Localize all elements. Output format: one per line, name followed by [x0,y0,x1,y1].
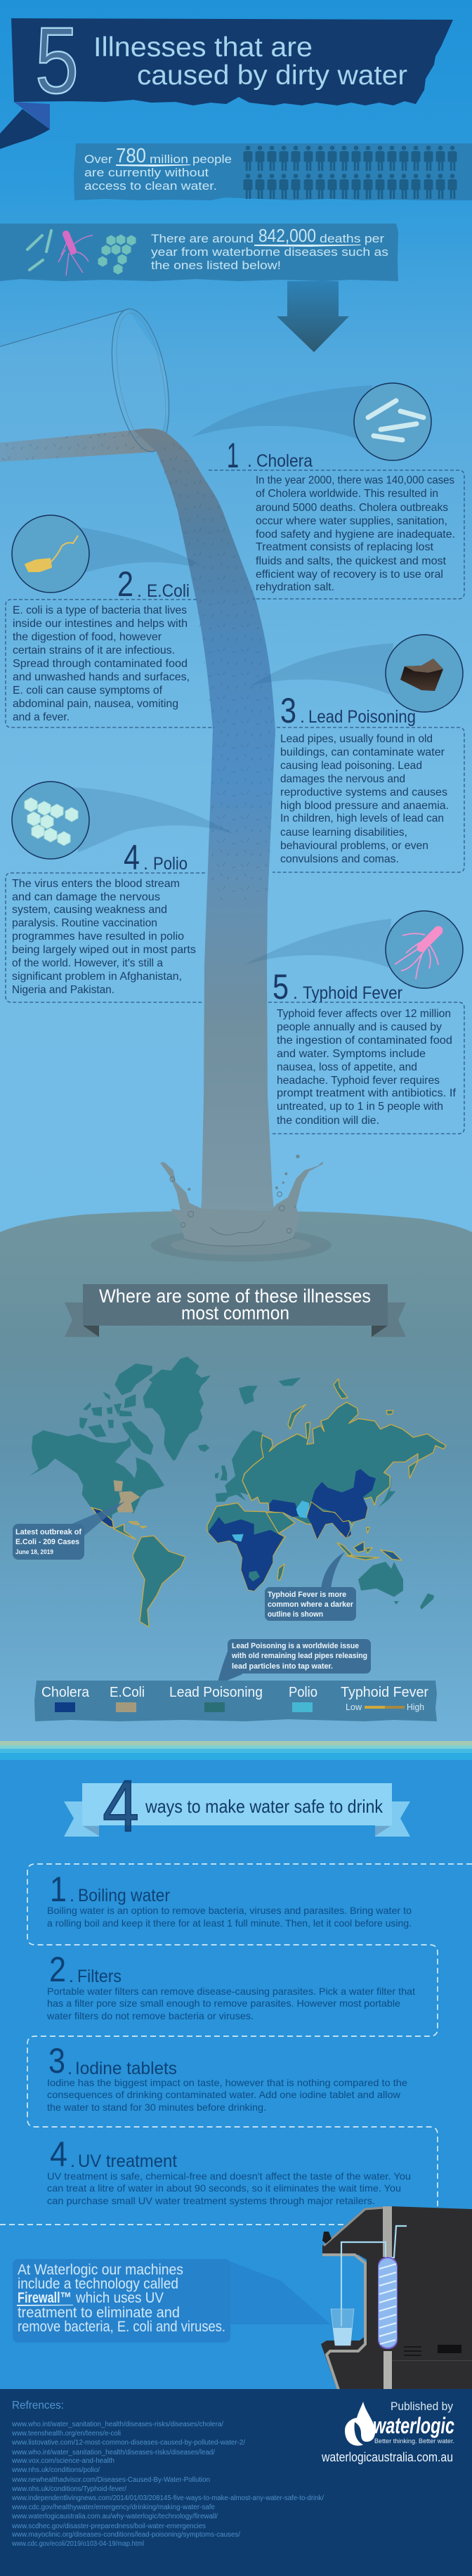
heading: 2 [49,1950,66,1989]
heading: . [137,581,142,601]
water splash [151,1155,332,1262]
body text: prompt treatment with antibiotics. If [277,1087,457,1099]
heading [48,2041,177,2080]
body text: and can damage the nervous [12,891,160,903]
callout: latest e. coli outbreak: June 18, 2019 [15,1548,53,1555]
method 4: uv treatment [47,2135,411,2206]
statistic text: There are around [151,232,254,245]
body text: fluids and salts, the quickest and most [256,555,447,567]
references: Refrences: [12,2400,64,2412]
heading: 4 [124,838,140,877]
body text [12,878,196,996]
references: www.newhealthadvisor.com/Diseases-Caused-By-Water-Pollution [11,2476,210,2484]
illustration: water cooler machine [321,2206,472,2390]
drinking glass [331,2309,354,2345]
body text: headache. Typhoid fever requires [277,1075,440,1087]
publisher block: Published by [391,2400,453,2413]
icon: germs [27,231,136,276]
body text: a rolling boil and keep it there for at least 1 full minute. Then, let it cool before using. [47,1917,412,1929]
references: www.independentlivingnews.com/2014/01/03/208145-five-ways-to-make-almost-any-water-safe-to-drink/ [11,2494,324,2502]
ribbon text [99,1286,371,1323]
map: europe, asia, africa [207,1378,446,1591]
heading [280,691,416,730]
method 3: iodine tablets [47,2041,407,2113]
pool of dirty water [0,1211,472,1741]
heading [50,1870,170,1909]
world map [29,1357,446,1627]
body text [277,1008,457,1127]
heading: Iodine tablets [75,2059,177,2078]
heading: . [300,707,305,727]
body text: the water to stand for 30 minutes before drinking. [47,2102,266,2113]
machine tubes [341,2226,407,2326]
heading: Boiling water [78,1886,170,1905]
body text [13,604,190,723]
references: www.scdhec.gov/disaster-preparedness/boil-water-emergencies [11,2523,206,2530]
big number five: 5 [35,8,79,113]
body text: Boiling water is an option to remove bacteria, viruses and parasites. Bring water to [47,1905,412,1916]
heading [227,436,313,475]
panel: 842,000 deaths statistic [0,224,398,281]
icon: polio virus cells [12,782,89,859]
legend labels: Cholera [41,1685,90,1700]
body text: paralysis. Routine vaccination [12,917,157,929]
heading: 1 [227,436,239,475]
map: central america [91,1508,146,1539]
callout: typhoid fever [265,1552,356,1621]
title text: caused by dirty water [137,60,407,91]
references: www.who.int/water_sanitation_health/diseases-risks/diseases/cholera/ [11,2421,223,2428]
body text: convulsions and comas. [280,853,399,865]
callout: typhoid fever: Typhoid Fever is more [268,1591,346,1599]
panel: 780 million statistic [74,143,472,200]
callout: lead poisoning [217,1639,371,1685]
body text: consequences of drinking contaminated water. Add one iodine tablet and allow [47,2089,401,2100]
callout beam [191,385,372,439]
dashed serpentine outline of the four methods [0,1864,472,2225]
beam from firewall panel to glass [229,2261,331,2324]
statistic text: year from waterborne diseases such as [151,245,388,259]
body text: of the world. However, it's still a [12,957,163,969]
body text: behavioural problems, or even [280,840,428,852]
statistic text [151,225,388,272]
body text [256,474,455,593]
heading: Typhoid Fever [303,983,402,1003]
heading ribbon: where illnesses are common [65,1284,406,1337]
body text: untreated, up to 1 in 5 people with [277,1101,443,1113]
references: www.cdc.gov/ecoli/2019/o103-04-19/map.html [11,2540,144,2548]
legend scale low to high: High [407,1702,424,1712]
references: www.mayoclinic.org/diseases-conditions/lead-poisoning/symptoms-causes/ [11,2531,240,2539]
body text: occur where water supplies, sanitation, [256,515,447,527]
icon: lead chunk [386,635,463,712]
title banner [0,8,453,149]
ribbon text: ways to make water safe to drink [145,1796,383,1817]
body text: E. coli is a type of bacteria that lives [13,604,187,616]
body text: Iodine has the biggest impact on taste, however that is nothing compared to the [47,2077,407,2088]
body text: programmes have resulted in polio [12,931,184,943]
callout: typhoid fever: outline is shown [268,1610,323,1619]
body text: causing lead poisoning. Lead [280,760,422,772]
callout: lead poisoning: Lead Poisoning is a worldwide issue [232,1642,359,1650]
legend labels: Typhoid Fever [341,1685,428,1700]
references: www.teenshealth.org/en/teens/e-coli [11,2430,121,2438]
heading: 4 [50,2135,67,2174]
heading [124,838,188,877]
uv coil [378,2257,398,2349]
callout: latest e. coli outbreak [13,1501,125,1560]
heading: . [143,854,148,874]
body text: food safety and hygiene are inadequate. [256,529,455,541]
heading [49,1950,122,1989]
disease 1: cholera [191,383,464,599]
map legend [34,1681,437,1721]
heading ribbon: 4 ways to make water safe [64,1766,410,1847]
body text: people annually and is caused by [277,1021,442,1033]
statistic text: million [150,153,188,166]
body text: the ingestion of contaminated food [277,1035,452,1047]
ribbon text: Where are some of these illnesses [99,1286,371,1307]
legend swatches [55,1702,313,1712]
panel: waterlogic firewall [13,2259,230,2343]
heading: 1 [50,1870,67,1909]
disease 2: e. coli [6,515,214,727]
ribbon text: most common [181,1302,289,1323]
body text: significant problem in Afghanistan, [12,971,182,983]
statistic text: are currently without [84,166,209,179]
body text [46,1986,415,2021]
statistic text: people [192,153,232,166]
callout: latest e. coli outbreak: E.Coli - 209 Cases [15,1538,79,1546]
heading: . [70,2151,75,2171]
firewall text: At Waterlogic our machines [18,2262,183,2278]
references [11,2400,324,2548]
heading: UV treatment [78,2151,177,2171]
method 1: boiling water [47,1870,412,1929]
water pouring stream [133,429,275,1223]
body text: the condition will die. [277,1115,379,1127]
disease 4: polio [6,782,235,1002]
body text: and a fever. [13,711,70,723]
heading: E.Coli [147,581,190,601]
body text: has a filter pore size small enough to remove parasites. However most portable [47,1998,400,2009]
callout beam [72,787,235,853]
icon: typhoid bacterium [386,911,463,988]
body text: reproductive systems and causes [280,787,447,798]
body text [47,2077,407,2113]
map: indonesia and islands [337,1527,402,1560]
heading: . [70,1886,74,1905]
body text: In children, high levels of lead can [280,813,444,824]
legend scale low to high [346,1702,424,1712]
statistic text [84,145,232,193]
statistic text: 780 [116,145,146,167]
heading: . [69,1967,74,1986]
callout beam [244,919,391,968]
callout: typhoid fever: common where a darker [268,1600,354,1609]
firewall text [18,2262,225,2335]
body text: around 5000 deaths. Cholera outbreaks [256,502,448,514]
heading [273,967,402,1007]
body text: Lead pipes, usually found in old [280,733,433,745]
disease 5: typhoid fever [244,911,464,1134]
title text [93,32,407,91]
body text: Nigeria and Pakistan. [12,984,114,996]
firewall text: include a technology called [18,2276,178,2292]
publisher block: waterlogicaustralia.com.au [321,2450,453,2464]
body text: Typhoid fever affects over 12 million [277,1008,451,1020]
body text: cause learning disabilities, [280,827,407,839]
big number four: 4 [103,1766,139,1847]
callout beam [80,527,197,573]
publisher block: Better thinking. Better water. [374,2438,454,2445]
legend labels: Polio [289,1685,317,1700]
heading [117,564,190,604]
body text: Spread through contaminated food [13,658,188,670]
body text: and unwashed hands and surfaces, [13,671,190,683]
body text: system, causing weakness and [12,904,167,916]
map: cholera regions [209,1469,376,1591]
map: polio regions [232,1501,309,1541]
title text: Illnesses that are [93,32,313,63]
body text: being largely wiped out in most parts [12,944,196,956]
firewall text: Firewall™ [18,2290,72,2306]
body text: water filters do not remove bacteria or viruses. [46,2010,254,2021]
references: www.listovative.com/12-most-common-diseases-caused-by-polluted-water-2/ [11,2439,245,2447]
icon: waterlogic water drop logo [345,2402,375,2446]
heading: Cholera [256,451,313,471]
heading: . [67,2059,72,2078]
body text: efficient way of recovery is to use oral [256,569,443,581]
icon: cholera bacteria [354,383,431,460]
statistic text: deaths per [320,232,384,245]
body text: damages the nervous and [280,773,405,785]
heading: Lead Poisoning [308,707,416,727]
body text: Portable water filters can remove disease-causing parasites. Pick a water filter that [47,1986,415,1997]
heading: . [293,983,298,1003]
legend scale low to high: Low [346,1702,362,1712]
heading: 2 [117,564,133,604]
statistic text: 842,000 [258,225,316,246]
method 2: filters [46,1950,415,2021]
callout: lead poisoning: lead particles into tap water. [232,1662,333,1671]
callout: latest e. coli outbreak: Latest outbreak of [15,1528,81,1536]
glass pouring water [0,304,178,462]
body text: inside our intestines and helps with [13,618,188,630]
body text: The virus enters the blood stream [12,878,180,890]
map: south america [133,1536,185,1627]
heading: 3 [48,2041,65,2080]
legend labels [41,1685,428,1700]
heading: 3 [280,691,296,730]
publisher block [321,2400,454,2464]
firewall text: remove bacteria, E. coli and viruses. [18,2319,225,2335]
disease 3: lead poisoning [250,635,464,872]
map: e. coli affected states [114,1480,140,1513]
body text: nausea, loss of appetite, and [277,1061,417,1073]
statistic text: the ones listed below! [151,259,281,272]
body text: can purchase small UV water treatment systems through major retailers. [47,2195,375,2206]
body text [47,1905,412,1929]
section divider stripes and lower background [0,1741,472,2390]
body text: Treatment consists of replacing lost [256,541,434,553]
water inside the glass [0,430,166,462]
heading: 5 [273,967,289,1007]
body text: rehydration salt. [256,581,334,593]
body text: In the year 2000, there was 140,000 cases [256,474,454,486]
statistic text: access to clean water. [84,179,217,193]
body text: and water. Symptoms include [277,1048,426,1060]
icon: e. coli bacterium [12,515,89,593]
icon: rows of people [243,145,457,199]
arrow pointing down [277,281,349,352]
body text: high blood pressure and anaemia. [280,800,449,812]
heading: . [247,451,252,471]
callout beam [250,643,393,694]
legend labels: Lead Poisoning [169,1685,263,1700]
body text: of Cholera worldwide. This resulted in [256,488,438,500]
body text: the digestion of food, however [13,631,162,643]
body text: abdominal pain, nausea, vomiting [13,698,178,710]
body text: can treat a litre of water in about 90 seconds, so it eliminates the wait time. You [47,2182,401,2194]
body text: buildings, can contaminate water [280,746,445,758]
heading: Filters [77,1967,122,1986]
references: www.nhs.uk/conditions/Typhoid-fever/ [11,2485,126,2493]
callout: lead poisoning: with old remaining lead pipes releasing [231,1652,367,1660]
footer [0,2389,472,2576]
map: americas and greenland [29,1357,227,1539]
firewall text: which uses UV [75,2290,164,2306]
statistic text: Over [84,153,112,166]
body text [47,2170,411,2206]
references: www.vox.com/science-and-health [11,2457,114,2465]
references: www.nhs.uk/conditions/polio/ [11,2466,100,2474]
heading [50,2135,177,2174]
body text [280,733,449,865]
map: australia and new zealand [358,1562,434,1610]
heading: Polio [153,854,188,874]
references: www.who.int/water_sanitation_health/diseases-risks/diseases/lead/ [11,2449,215,2457]
body text: E. coli can cause symptoms of [13,685,163,697]
legend labels: E.Coli [110,1685,145,1700]
references: www.waterlogicaustralia.com.au/why-waterlogic/technology/firewall/ [11,2513,218,2520]
references: www.cdc.gov/healthywater/emergency/drinking/making-water-safe [11,2504,215,2511]
firewall text: treatment to eliminate and [18,2305,180,2321]
body text: UV treatment is safe, chemical-free and doesn't affect the taste of the water. You [47,2170,411,2182]
body text: certain strains of it are infectious. [13,645,175,656]
